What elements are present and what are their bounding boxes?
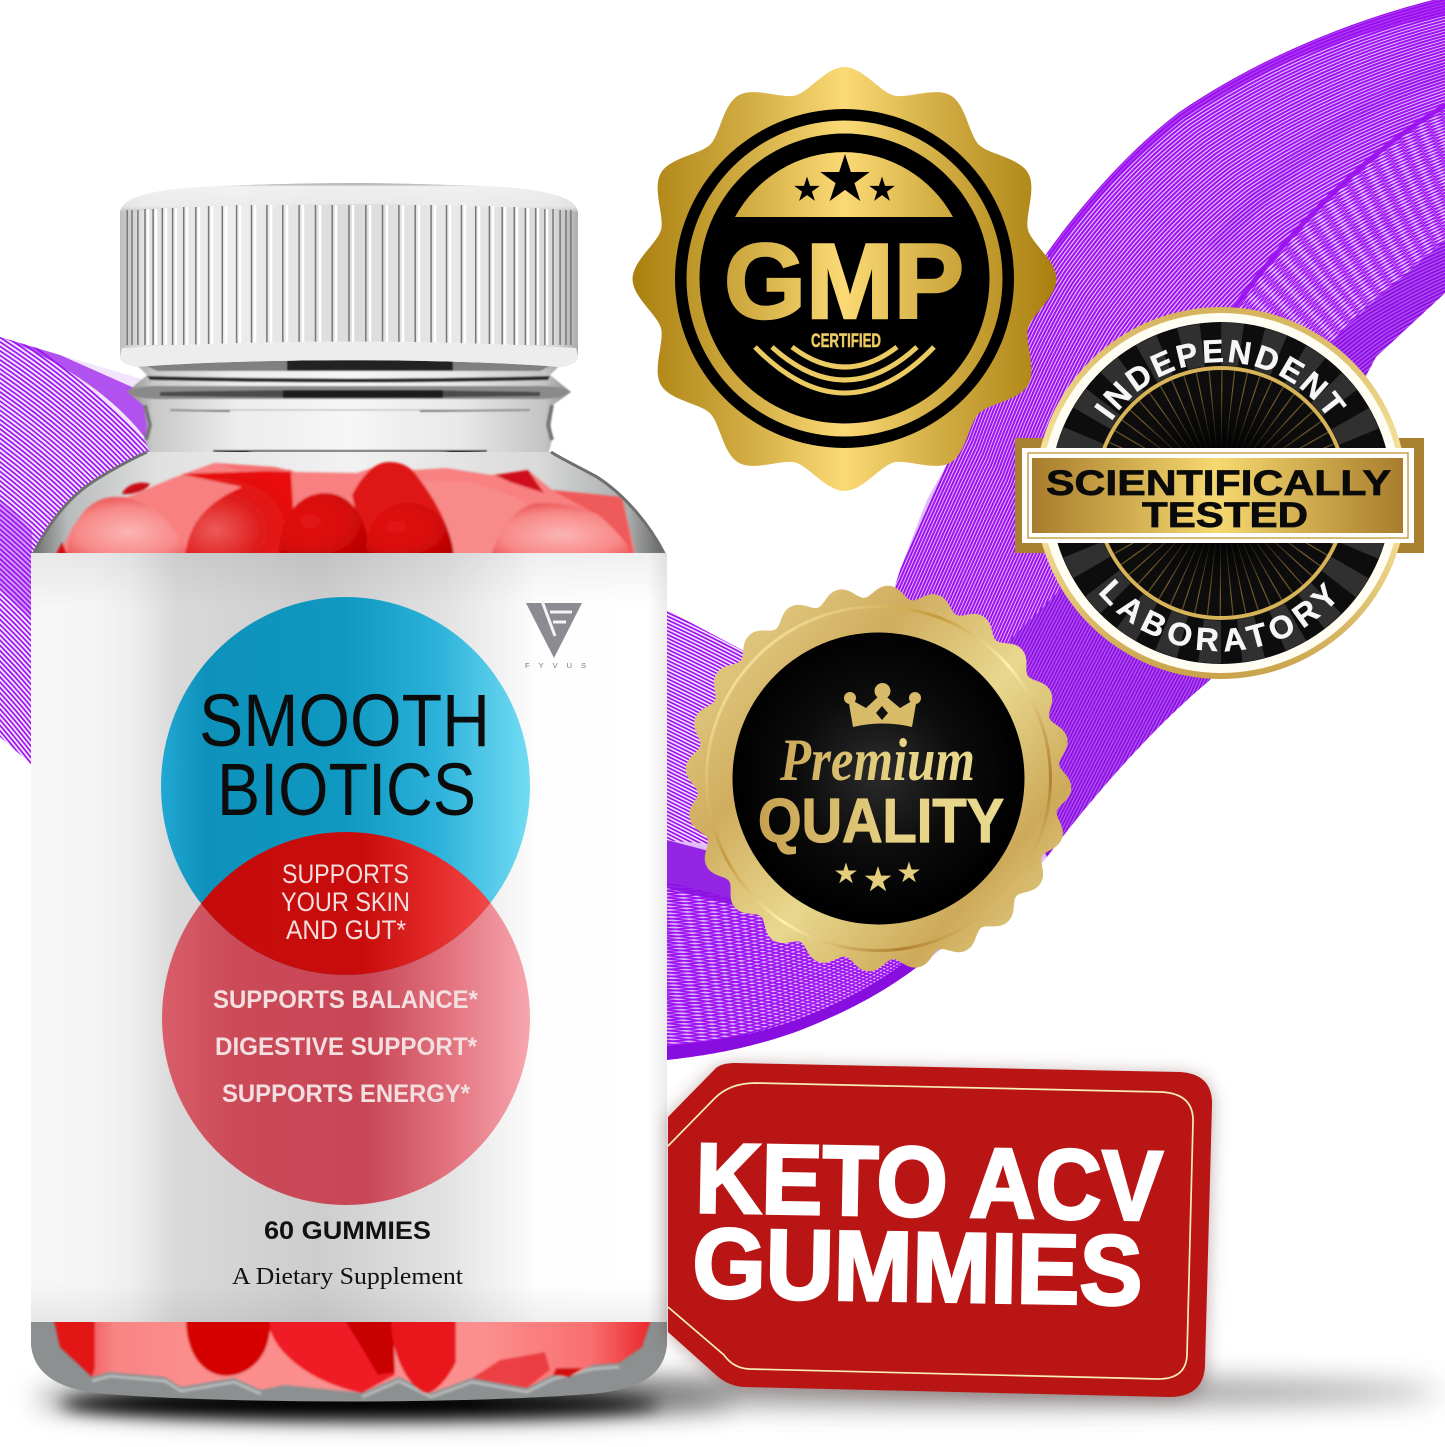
bottle cap bbox=[120, 183, 578, 367]
lens claim text: YOUR SKIN bbox=[281, 887, 410, 917]
lens claim text bbox=[281, 859, 410, 945]
lab outer rings bbox=[1035, 307, 1407, 679]
bottle upper glass and gummies bbox=[36, 452, 662, 553]
red circle bbox=[162, 832, 530, 1205]
ribbon deep band right bbox=[1006, 240, 1445, 857]
product name bbox=[199, 679, 490, 831]
product name: SMOOTH bbox=[199, 679, 490, 762]
tag shape bbox=[668, 1063, 1212, 1397]
benefit list: SUPPORTS BALANCE* bbox=[213, 986, 478, 1014]
GMP rings bbox=[675, 109, 1014, 448]
badge: premium quality bbox=[680, 580, 1078, 978]
purple ribbon: main sweep bbox=[667, 0, 1445, 1060]
ribbon soft streak bbox=[1215, 70, 1445, 250]
tag headline line two: GUMMIES bbox=[692, 1207, 1144, 1326]
lab banner: TESTED bbox=[1142, 496, 1308, 535]
benefit list bbox=[213, 986, 478, 1108]
ribbon deep band middle bbox=[667, 840, 734, 906]
ribbon deep band bottom edge bbox=[667, 958, 917, 1060]
benefit list: SUPPORTS ENERGY* bbox=[222, 1080, 470, 1108]
ribbon crosshatch band bbox=[1232, 103, 1445, 344]
lab badge tails bbox=[1015, 438, 1424, 553]
ribbon left arm lower strands bbox=[667, 884, 941, 1060]
premium black disc bbox=[732, 632, 1024, 924]
red lens overlap bbox=[201, 832, 490, 975]
certified text: CERTIFIED bbox=[811, 331, 881, 352]
floor shadow bbox=[35, 1378, 1440, 1419]
blue circle bbox=[161, 597, 530, 975]
ribbon upper strands bbox=[894, 0, 1445, 838]
lab banner bbox=[1022, 448, 1414, 543]
lab inner disc bbox=[1094, 366, 1348, 620]
quality wordmark: QUALITY bbox=[758, 787, 1004, 856]
lab ring sectors bbox=[1072, 344, 1370, 642]
tag inner outline bbox=[668, 1083, 1193, 1379]
badge: GMP certified bbox=[630, 60, 1060, 495]
benefit list: DIGESTIVE SUPPORT* bbox=[215, 1033, 477, 1061]
bottle label bbox=[31, 553, 667, 1322]
GMP arcs bbox=[755, 347, 934, 393]
brand logo: FYVUS bbox=[525, 661, 595, 670]
lab banner: SCIENTIFICALLY bbox=[1046, 464, 1391, 503]
gummy count: 60 GUMMIES bbox=[264, 1217, 431, 1245]
premium scalloped seal bbox=[680, 580, 1078, 978]
bottle upper glass outline bbox=[33, 452, 665, 555]
lens claim text: SUPPORTS bbox=[282, 859, 409, 889]
ribbon top edge band bbox=[1047, 0, 1445, 258]
tag headline line one: KETO ACV bbox=[695, 1122, 1163, 1241]
ribbon tone underlay bbox=[660, 0, 1445, 1070]
lens claim text: AND GUT* bbox=[286, 915, 406, 945]
product bottle bbox=[30, 183, 670, 1406]
premium thin ring bbox=[706, 606, 1050, 950]
product name: BIOTICS bbox=[217, 748, 476, 831]
GMP scalloped seal bbox=[630, 60, 1060, 495]
GMP wordmark: GMP bbox=[724, 221, 964, 341]
brand logo bbox=[525, 601, 595, 670]
premium stars bbox=[835, 862, 920, 891]
GMP dome with stars bbox=[735, 152, 953, 217]
supplement line: A Dietary Supplement bbox=[232, 1264, 463, 1290]
bottle lower glass and gummies bbox=[31, 1322, 667, 1402]
tag: keto acv gummies bbox=[668, 1063, 1212, 1397]
ribbon left arm upper strands bbox=[667, 610, 744, 844]
lab ring text top: INDEPENDENT bbox=[1094, 340, 1347, 420]
purple ribbon: left strands bbox=[0, 337, 150, 764]
premium script: Premium bbox=[779, 727, 975, 793]
icon: crown bbox=[844, 683, 921, 727]
bottle neck bbox=[127, 358, 571, 462]
badge: scientifically tested bbox=[1015, 307, 1424, 679]
lab ring text bottom: LABORATORY bbox=[1098, 578, 1335, 652]
